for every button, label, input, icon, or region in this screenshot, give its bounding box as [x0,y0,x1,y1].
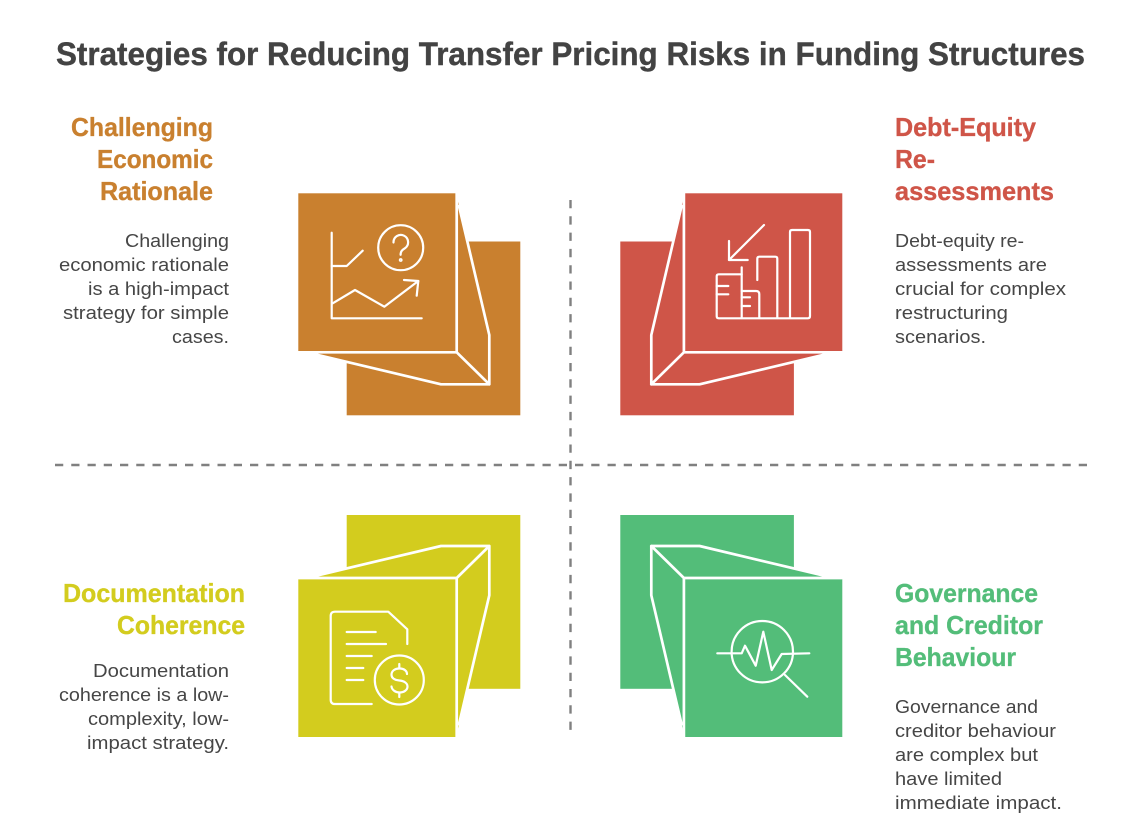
text block: governance and creditor behaviour: immediate impact. [895,792,1062,813]
icon: chart with question mark [332,225,423,318]
icon: document with dollar coin [331,612,424,704]
shape: green stacked squares [620,515,842,737]
text block: debt-equity re-assessments: assessments are [895,254,1047,275]
text block: governance and creditor behaviour: have limited [895,768,1002,789]
text block: debt-equity re-assessments [895,230,1067,347]
text block: documentation coherence [59,660,229,753]
text block: governance and creditor behaviour: creditor behaviour [895,720,1056,741]
text block: challenging economic rationale: cases. [172,326,229,347]
text block: challenging economic rationale: economic rationale [59,254,229,275]
heading: challenging economic rationale: Challenging [71,112,213,142]
text block: challenging economic rationale: strategy for simple [63,302,229,323]
text block: documentation coherence: impact strategy. [87,732,229,753]
text block: governance and creditor behaviour [895,696,1062,813]
text block: documentation coherence: coherence is a low- [59,684,229,705]
text block: challenging economic rationale [59,230,229,347]
text block: challenging economic rationale: Challenging [125,230,229,251]
heading: debt-equity re-assessments: Re- [895,144,935,174]
heading: documentation coherence [63,578,245,640]
quadrant divider: horizontal [55,464,1087,466]
icon: magnifier over pulse line [717,621,809,697]
heading: governance and creditor behaviour: Governance [895,578,1038,608]
text block: debt-equity re-assessments: scenarios. [895,326,986,347]
panel: debt-equity re-assessments [620,112,1067,415]
text block: governance and creditor behaviour: Governance and [895,696,1038,717]
heading: debt-equity re-assessments: Debt-Equity [895,112,1037,142]
heading: documentation coherence: Documentation [63,578,245,608]
heading: debt-equity re-assessments [895,112,1054,206]
heading: governance and creditor behaviour: and Creditor [895,610,1043,640]
heading: challenging economic rationale: Economic [97,144,213,174]
heading: governance and creditor behaviour: Behaviour [895,642,1016,672]
icon: falling arrow over bar chart [717,225,810,318]
shape: red stacked squares [620,193,842,415]
panel: governance and creditor behaviour [620,515,1062,813]
panel: documentation coherence [59,515,520,753]
heading: debt-equity re-assessments: assessments [895,176,1054,206]
text block: governance and creditor behaviour: are complex but [895,744,1038,765]
heading: documentation coherence: Coherence [117,610,245,640]
text block: debt-equity re-assessments: Debt-equity re- [895,230,1024,251]
quadrant divider: vertical [569,200,572,731]
shape: yellow stacked squares [298,515,520,737]
title: Strategies for Reducing Transfer Pricing Risks in Funding Structures [56,36,1085,72]
shape: orange stacked squares [298,193,520,415]
heading: governance and creditor behaviour [895,578,1043,672]
panel: challenging economic rationale [59,112,520,415]
text block: debt-equity re-assessments: restructuring [895,302,1008,323]
heading: challenging economic rationale: Rationale [100,176,213,206]
heading: challenging economic rationale [71,112,213,206]
text block: challenging economic rationale: is a high-impact [88,278,229,299]
text block: documentation coherence: Documentation [93,660,229,681]
text block: debt-equity re-assessments: crucial for complex [895,278,1067,299]
text block: documentation coherence: complexity, low- [88,708,229,729]
